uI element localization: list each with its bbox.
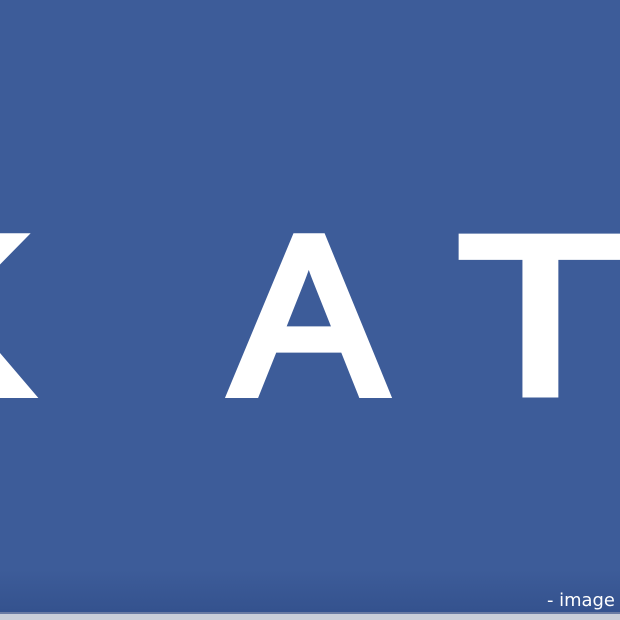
letter A: A [232, 190, 385, 442]
letter T: T [458, 189, 620, 441]
heading: cropped letters K A T [0, 189, 620, 442]
caption: image label: - image [547, 590, 615, 611]
